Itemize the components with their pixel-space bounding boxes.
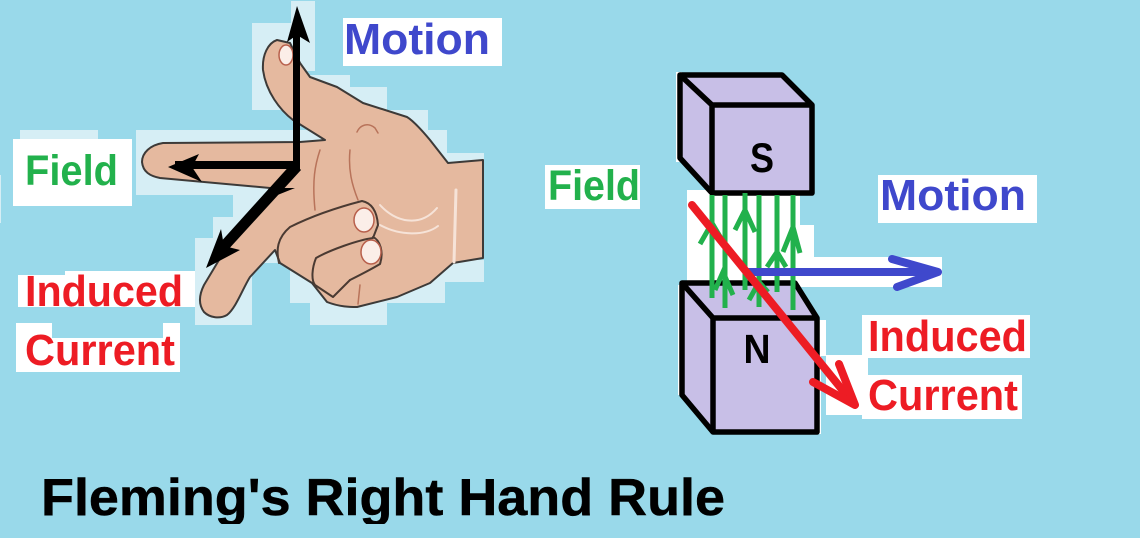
magnet: north pole bbox=[682, 283, 817, 432]
arrow: up, motion bbox=[287, 6, 310, 168]
illustration: magnets with field, motion and current bbox=[676, 72, 942, 434]
label: Induced Current (magnets) bbox=[862, 312, 1030, 420]
magnet: north pole: N bbox=[744, 326, 770, 372]
arrow: down-left, current bbox=[206, 162, 301, 268]
illustration: right hand with three arrows bbox=[0, 1, 484, 325]
motion arrow bbox=[747, 259, 938, 287]
finger and fist details bbox=[278, 125, 456, 304]
label: Induced Current (magnets): Current bbox=[868, 371, 1018, 420]
label: Field (hand): Field bbox=[25, 147, 118, 195]
hand shape bbox=[142, 40, 483, 317]
label: Induced Current (hand): Current bbox=[25, 326, 175, 375]
label: Motion (magnets): Motion bbox=[880, 171, 1026, 220]
arrow: left, field bbox=[168, 154, 300, 182]
label: Induced Current (hand) bbox=[16, 267, 195, 375]
label: Field (magnets): Field bbox=[548, 162, 640, 210]
magnet: south pole: S bbox=[750, 134, 774, 181]
label: Induced Current (hand): Induced bbox=[25, 267, 183, 316]
magnetic field lines bbox=[700, 193, 800, 310]
label: Induced Current (magnets): Induced bbox=[868, 312, 1027, 361]
label: Field (hand) bbox=[13, 139, 132, 206]
title: Fleming's Right Hand Rule bbox=[41, 469, 725, 527]
induced current arrow bbox=[692, 205, 855, 405]
fingernails bbox=[279, 45, 381, 264]
label: Motion (hand): Motion bbox=[344, 15, 490, 64]
magnet: south pole bbox=[680, 75, 812, 193]
